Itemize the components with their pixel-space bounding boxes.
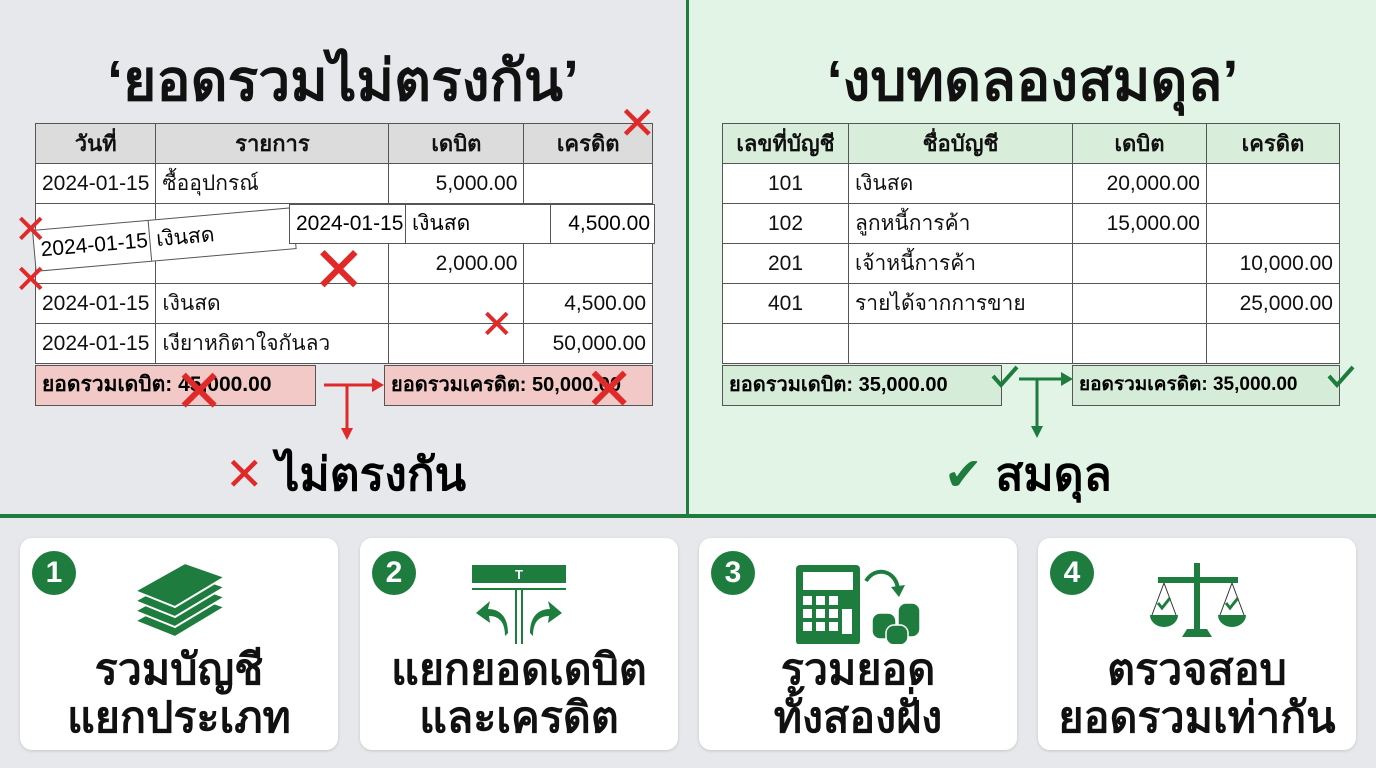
displaced row: 4,500.00 [568,212,650,235]
status mismatch: ✕ ไม่ตรงกัน [225,448,466,500]
card 4: 4 [1064,556,1080,589]
total credit right [1072,365,1340,406]
table left: 2024-01-15 [42,292,149,314]
card 1: รวมบัญชี [95,646,263,694]
title left: ‘ยอดรวมไม่ตรงกัน’ [107,49,579,113]
icon: T account [472,565,566,644]
total debit right [722,365,1002,406]
table left: ซื้ออุปกรณ์ [162,172,259,195]
panel: left mismatch [0,0,686,514]
card 3: ทั้งสองฝั่ง [774,694,942,742]
total credit [384,365,653,406]
table right: 201 [768,252,803,274]
panel: left mismatch: ✕ [618,97,657,149]
table right: เงินสด [855,172,913,195]
displaced row: เงินสด [412,212,470,235]
table right: 20,000.00 [1107,172,1200,194]
card 2: และเครดิต [419,694,619,742]
icon: scale [1150,563,1246,637]
displaced row: 2024-01-15 [296,212,403,235]
card 1 [20,538,338,750]
table right: ชื่อบัญชี [923,131,998,156]
tilted row [32,207,297,272]
table left: เงียาหกิตาใจกันลว [162,332,330,355]
table left: 5,000.00 [436,172,517,194]
total debit: ยอดรวมเดบิต: 45,000.00 [42,373,272,396]
panel: left mismatch: ✕ [174,358,224,425]
table right: 10,000.00 [1240,252,1333,274]
table left: 50,000.00 [553,332,646,354]
table left: เดบิต [431,131,481,156]
table left: เครดิต [557,131,620,156]
panel: left mismatch: ✕ [480,303,514,347]
total debit right: ยอดรวมเดบิต: 35,000.00 [729,374,948,396]
card 4: ยอดรวมเท่ากัน [1058,694,1336,742]
divider vertical [686,0,689,516]
table left: รายการ [235,131,310,156]
displaced row [289,204,655,244]
card 4: ตรวจสอบ [1107,646,1287,694]
table right: รายได้จากการขาย [855,292,1026,315]
table right: เครดิต [1242,131,1304,156]
arrow red [324,378,384,440]
card 3: รวมยอด [781,646,935,694]
table left: 2024-01-15 [42,172,149,194]
card 2 [360,538,678,750]
card 3 [699,538,1017,750]
checks and arrow [992,366,1354,438]
card 1: แยกประเภท [67,694,291,742]
x marks [14,97,657,425]
table right: เจ้าหนี้การค้า [855,252,976,275]
table left: 2024-01-15 [42,332,149,354]
table right [722,123,1340,364]
icon: T account: T [515,567,523,582]
table right: 25,000.00 [1240,292,1333,314]
table right: ลูกหนี้การค้า [855,212,970,235]
panel: right balanced [689,0,1376,514]
table left: 2,000.00 [436,252,517,274]
panel: left mismatch: ✕ [14,208,48,252]
divider horizontal [0,514,1376,518]
table right: เลขที่บัญชี [736,131,835,156]
total credit right: ยอดรวมเครดิต: 35,000.00 [1079,374,1298,395]
table right: เดบิต [1114,131,1165,156]
table right: 101 [768,172,803,194]
card 1: 1 [46,556,62,589]
card 3: 3 [725,556,741,589]
table right: 401 [768,292,803,314]
card 2: 2 [386,556,402,589]
tilted row: 2024-01-15 [40,229,149,261]
panel: left mismatch: ✕ [312,234,366,306]
card 2: แยกยอดเดบิต [391,646,647,694]
total credit: ยอดรวมเครดิต: 50,000.00 [391,374,621,396]
panel: left mismatch: ✕ [14,258,48,302]
card 4 [1038,538,1356,750]
title right: ‘งบทดลองสมดุล’ [827,49,1238,113]
table right: 102 [768,212,803,234]
tilted row: เงินสด [155,223,215,251]
table right: 15,000.00 [1107,212,1200,234]
panel: left mismatch: ✕ [584,356,634,423]
table left: เงินสด [162,292,221,315]
table left: 4,500.00 [564,292,646,314]
table left [35,123,653,364]
total debit [35,365,316,406]
status balanced: ✔ สมดุล [944,448,1112,500]
table left: วันที่ [75,131,117,156]
icon: books [137,564,223,636]
icon: calculator coins [796,565,920,644]
